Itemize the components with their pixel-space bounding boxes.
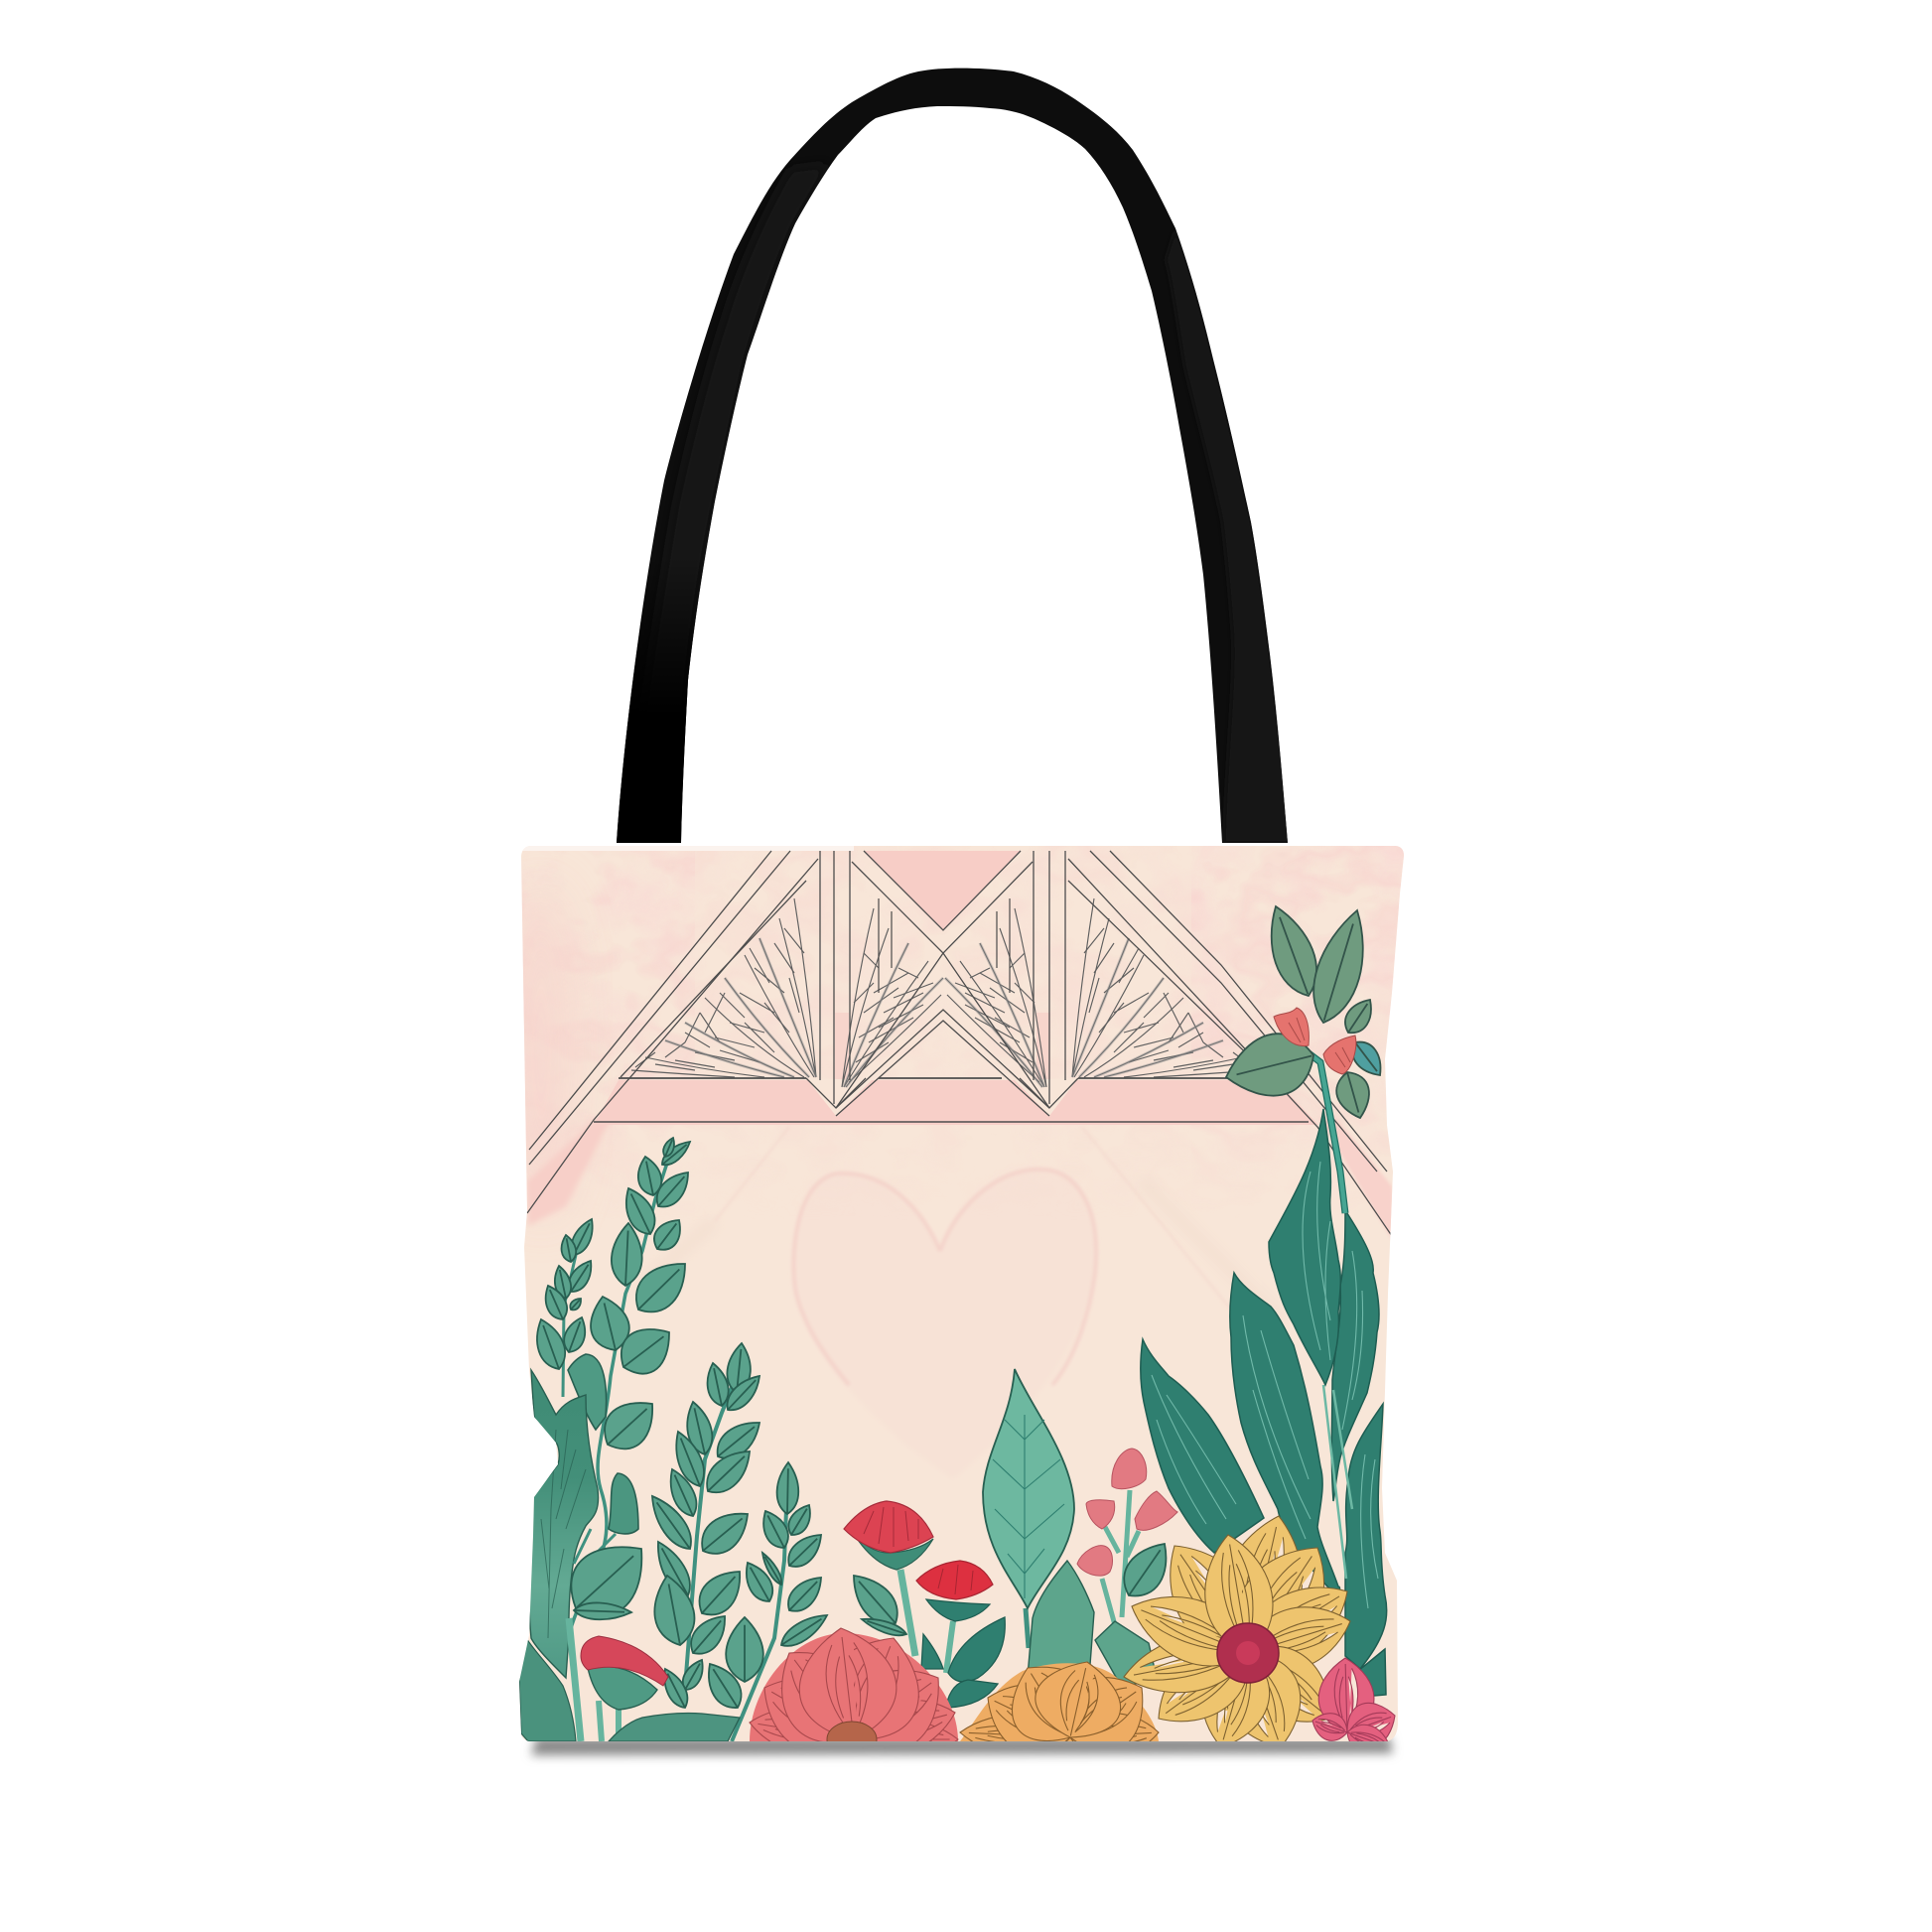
band notches: [806, 1078, 1078, 1116]
magenta flower: [1311, 1657, 1396, 1741]
leaf fans: [631, 898, 1257, 1087]
bag body: [519, 846, 1404, 1741]
top geometric pattern: [527, 851, 1394, 1243]
plant: small far-left sprig: [536, 1217, 594, 1397]
side blush: left: [524, 923, 570, 1170]
pattern lines: [527, 851, 1392, 1236]
plant: right small sprig: [699, 1462, 832, 1741]
plant: tall left sprig: [571, 1136, 698, 1628]
plant: centre-left sprig: [651, 1342, 760, 1709]
bottom dark leaf: [609, 1714, 740, 1741]
yellow flower: [1123, 1515, 1351, 1741]
red poppy one: [842, 1501, 933, 1656]
orange flower: [959, 1661, 1160, 1741]
pink band: [594, 1080, 1318, 1125]
pink side stripes: [527, 1117, 1394, 1243]
plant: large folded leaf: [519, 1353, 643, 1741]
top hem: [522, 846, 854, 851]
pink flower: [749, 1627, 959, 1741]
pink top triangle: [864, 851, 1021, 930]
red poppy two: [916, 1561, 993, 1673]
teal leaf tall right: [1331, 1210, 1379, 1501]
heart watermark: [791, 1168, 1098, 1386]
pink buds and stems: [1077, 1449, 1179, 1625]
marble texture: [524, 846, 1404, 1120]
mint leaf: [983, 1369, 1074, 1648]
tall teal leaves: [1141, 1109, 1387, 1697]
teal leaf far right: [1345, 1404, 1387, 1669]
teal leaf tall main: [1269, 1109, 1340, 1385]
bag shadow: [531, 1737, 1393, 1755]
teal leaf left: [1141, 1339, 1264, 1553]
top-right flower sprig: [1218, 899, 1389, 1213]
teal leaf small: [1358, 1649, 1386, 1697]
handle: [596, 69, 1301, 844]
fabric folds: [635, 1181, 1281, 1320]
second mint leaves: [1028, 1561, 1157, 1688]
faint chevron lines: [715, 1127, 1281, 1370]
pink vertical slivers: [835, 1013, 1050, 1080]
teal leaf centre: [1230, 1273, 1340, 1598]
small red flower: [581, 1636, 668, 1741]
dark leaves by poppies: [921, 1617, 1005, 1708]
